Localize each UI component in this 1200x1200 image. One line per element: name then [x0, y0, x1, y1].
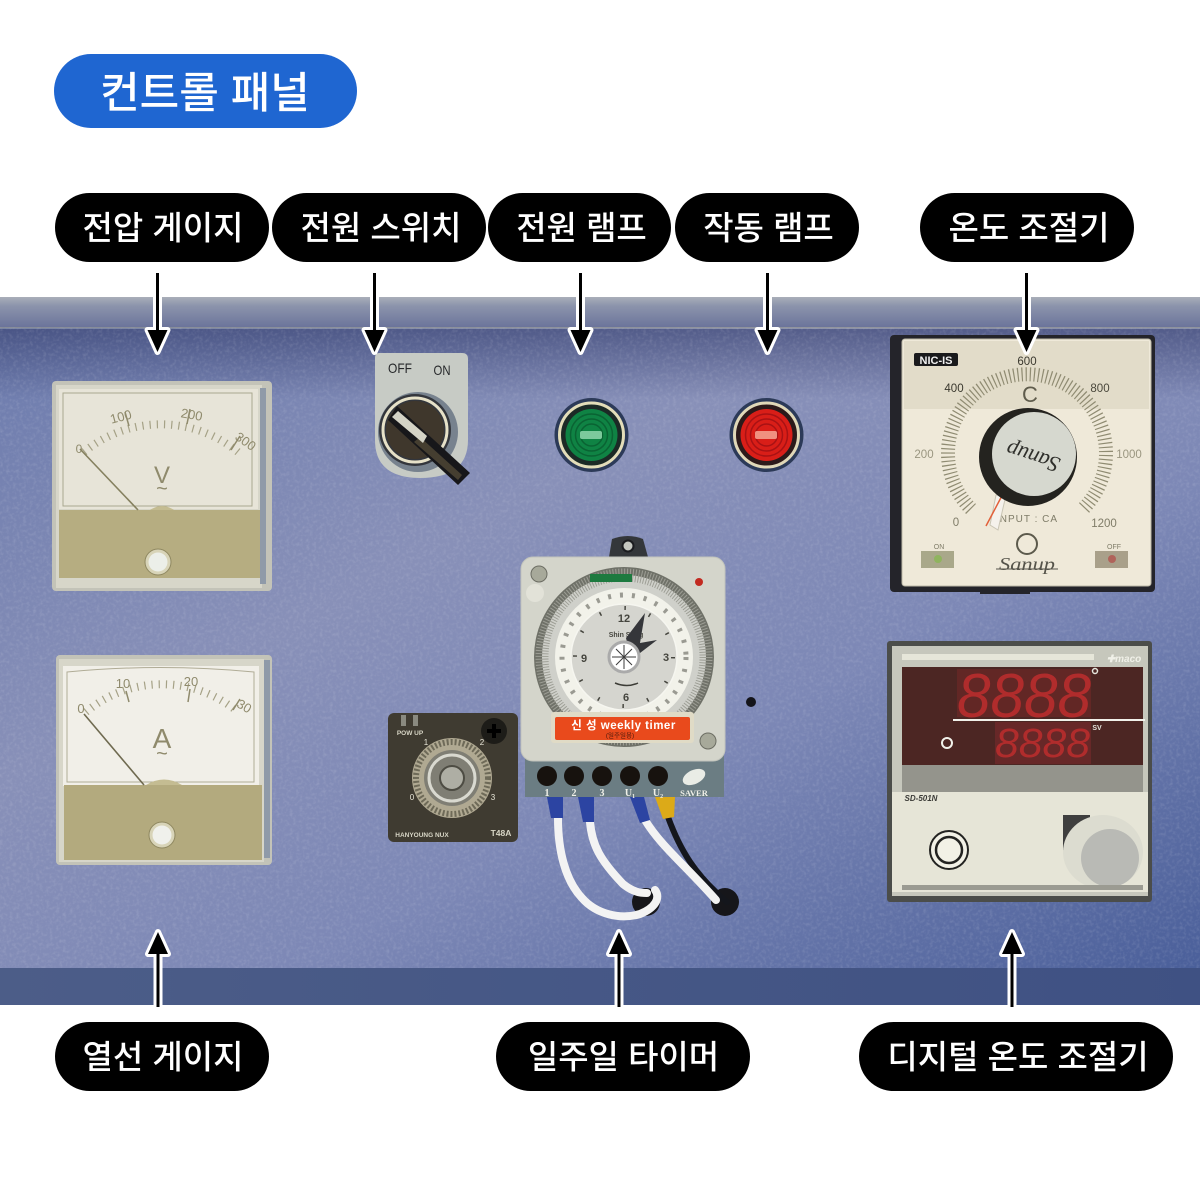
timer: weekly timer: SAVER: [680, 788, 709, 798]
label: 일주일 타이머: 일주일 타이머: [528, 1038, 719, 1076]
timer: T48A: POW UP: [397, 730, 424, 737]
timer: weekly timer: 2: [572, 788, 576, 799]
temperature controller: analog: 200: [914, 449, 934, 461]
temperature controller: digital: SV: [1092, 725, 1102, 732]
label: 전원 램프: 전원 램프: [516, 210, 647, 246]
timer: T48A: T48A: [491, 828, 511, 838]
timer: weekly timer: 12: [618, 613, 630, 625]
switch: power: [375, 353, 470, 485]
timer: weekly timer: (일주일용): [606, 730, 634, 740]
gauge: voltage: V: [154, 462, 170, 489]
timer: weekly timer: U₂: [653, 788, 663, 799]
label: 전원 램프: [488, 193, 671, 262]
timer: T48A: [388, 713, 518, 842]
timer: weekly timer: 신 성 weekly timer: [571, 719, 676, 732]
timer: weekly timer: Shin Sung: [609, 632, 643, 639]
temperature controller: digital: 8888: [957, 662, 1091, 731]
temperature controller: digital: 8888: [995, 720, 1090, 766]
gauge: current: 0: [77, 701, 85, 716]
timer: T48A: 1: [424, 738, 429, 747]
temperature controller: analog: 600: [1017, 356, 1037, 368]
timer: weekly timer: 1: [544, 788, 550, 799]
temperature controller: analog: NIC-IS: [920, 355, 952, 367]
gauge: voltage: 300: [232, 429, 259, 454]
gauge: current: 30: [234, 696, 254, 716]
timer: weekly timer: [521, 536, 725, 799]
temperature controller: digital: [887, 641, 1152, 902]
label: 전압 게이지: 전압 게이지: [83, 210, 243, 246]
label: 작동 램프: [675, 193, 859, 262]
lamp: red: [730, 398, 804, 472]
wires: [547, 697, 756, 916]
label: 온도 조절기: [920, 193, 1134, 262]
gauge: current: [56, 655, 272, 865]
gauge: voltage: 100: [108, 407, 133, 427]
label: 일주일 타이머: [496, 1022, 750, 1091]
arrow: to weekly timer: [609, 932, 629, 1007]
temperature controller: analog: OFF: [1107, 544, 1121, 551]
label: 열선 게이지: [55, 1022, 269, 1091]
gauge: current: 10: [116, 676, 130, 691]
timer: weekly timer: 6: [623, 692, 629, 704]
title: 컨트롤 패널: [100, 70, 310, 118]
gauge: voltage: 0: [76, 442, 83, 456]
arrow: to temperature controller: [1016, 273, 1036, 352]
temperature controller: analog: 800: [1090, 383, 1110, 395]
temperature controller: analog: C: [1022, 382, 1038, 407]
temperature controller: analog: 400: [944, 383, 964, 395]
timer: T48A: HANYOUNG NUX: [395, 832, 449, 839]
arrow: to digital controller: [1002, 932, 1022, 1007]
gauge: current: A: [153, 723, 172, 754]
temperature controller: analog: INPUT : CA: [996, 514, 1058, 525]
gauge: voltage: 200: [180, 405, 204, 424]
timer: weekly timer: 3: [600, 788, 604, 799]
temperature controller: digital: ✚maco: [1107, 654, 1141, 665]
timer: weekly timer: 9: [581, 653, 587, 665]
temperature controller: analog: 1000: [1116, 449, 1142, 461]
label: 작동 램프: 작동 램프: [703, 210, 834, 246]
temperature controller: digital: SD-501N: [905, 794, 938, 803]
timer: T48A: 2: [480, 738, 485, 747]
label: 온도 조절기: 온도 조절기: [949, 210, 1109, 246]
arrow: to power lamp: [570, 273, 590, 352]
temperature controller: analog: Sanup: [1003, 437, 1063, 478]
timer: T48A: 3: [491, 793, 496, 802]
temperature controller: analog: Sanup: [999, 554, 1055, 574]
temperature controller: analog: 1200: [1091, 518, 1117, 530]
label: 디지털 온도 조절기: 디지털 온도 조절기: [887, 1038, 1149, 1076]
label: 전원 스위치: [272, 193, 486, 262]
timer: weekly timer: 3: [663, 652, 669, 664]
label: 전원 스위치: 전원 스위치: [301, 210, 461, 246]
gauge: current: 20: [184, 674, 198, 689]
timer: T48A: 0: [410, 793, 415, 802]
arrow: to voltage gauge: [148, 273, 168, 352]
temperature controller: analog: 0: [953, 517, 959, 529]
label: 열선 게이지: 열선 게이지: [83, 1038, 243, 1076]
gauge: voltage: [52, 381, 272, 591]
arrow: to power switch: [364, 273, 384, 352]
arrow: to heater gauge: [148, 932, 168, 1007]
gauge: current: ~: [156, 743, 168, 765]
label: 디지털 온도 조절기: [859, 1022, 1173, 1091]
label: 전압 게이지: [55, 193, 269, 262]
temperature controller: analog: ON: [934, 544, 944, 551]
temperature controller: analog: [890, 335, 1155, 594]
switch: power: ON: [434, 362, 450, 378]
timer: weekly timer: U₁: [625, 788, 635, 799]
panel: control panel background: [0, 297, 1200, 1005]
title: [54, 54, 357, 128]
lamp: green: [554, 398, 628, 472]
switch: power: OFF: [388, 360, 412, 376]
gauge: voltage: ~: [156, 478, 168, 500]
arrow: to run lamp: [758, 273, 778, 352]
